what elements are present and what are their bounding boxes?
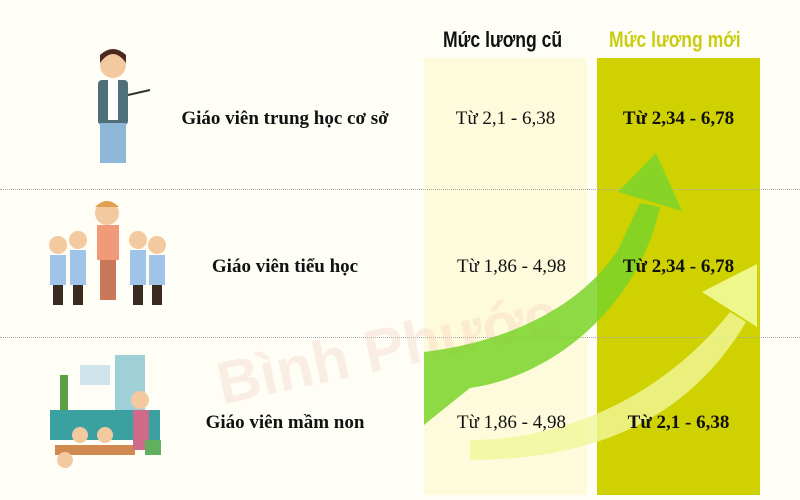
row 2 old: Từ 1,86 - 4,98 <box>457 256 566 277</box>
row 1 old: Từ 2,1 - 6,38 <box>456 108 555 129</box>
column: old salary background <box>424 58 587 495</box>
arrow: light yellow <box>470 264 757 460</box>
row 2 new: Từ 2,34 - 6,78 <box>623 256 734 277</box>
row 1 label: Giáo viên trung học cơ sở <box>181 108 389 129</box>
icon: secondary teacher <box>98 49 150 163</box>
icon: kindergarten classroom <box>50 355 161 468</box>
row 3 new: Từ 2,1 - 6,38 <box>628 412 729 433</box>
watermark: Bình Phước <box>211 280 563 417</box>
row 2 label: Giáo viên tiểu học <box>212 256 358 277</box>
row 3 old: Từ 1,86 - 4,98 <box>457 412 566 433</box>
column: new salary background <box>597 58 760 495</box>
arrow: green <box>424 153 682 425</box>
row 3 label: Giáo viên mầm non <box>206 412 364 433</box>
icon: primary teacher with children <box>49 201 166 305</box>
heading: old salary: Mức lương cũ <box>443 27 562 52</box>
heading: new salary: Mức lương mới <box>609 27 741 52</box>
row 1 new: Từ 2,34 - 6,78 <box>623 108 734 129</box>
